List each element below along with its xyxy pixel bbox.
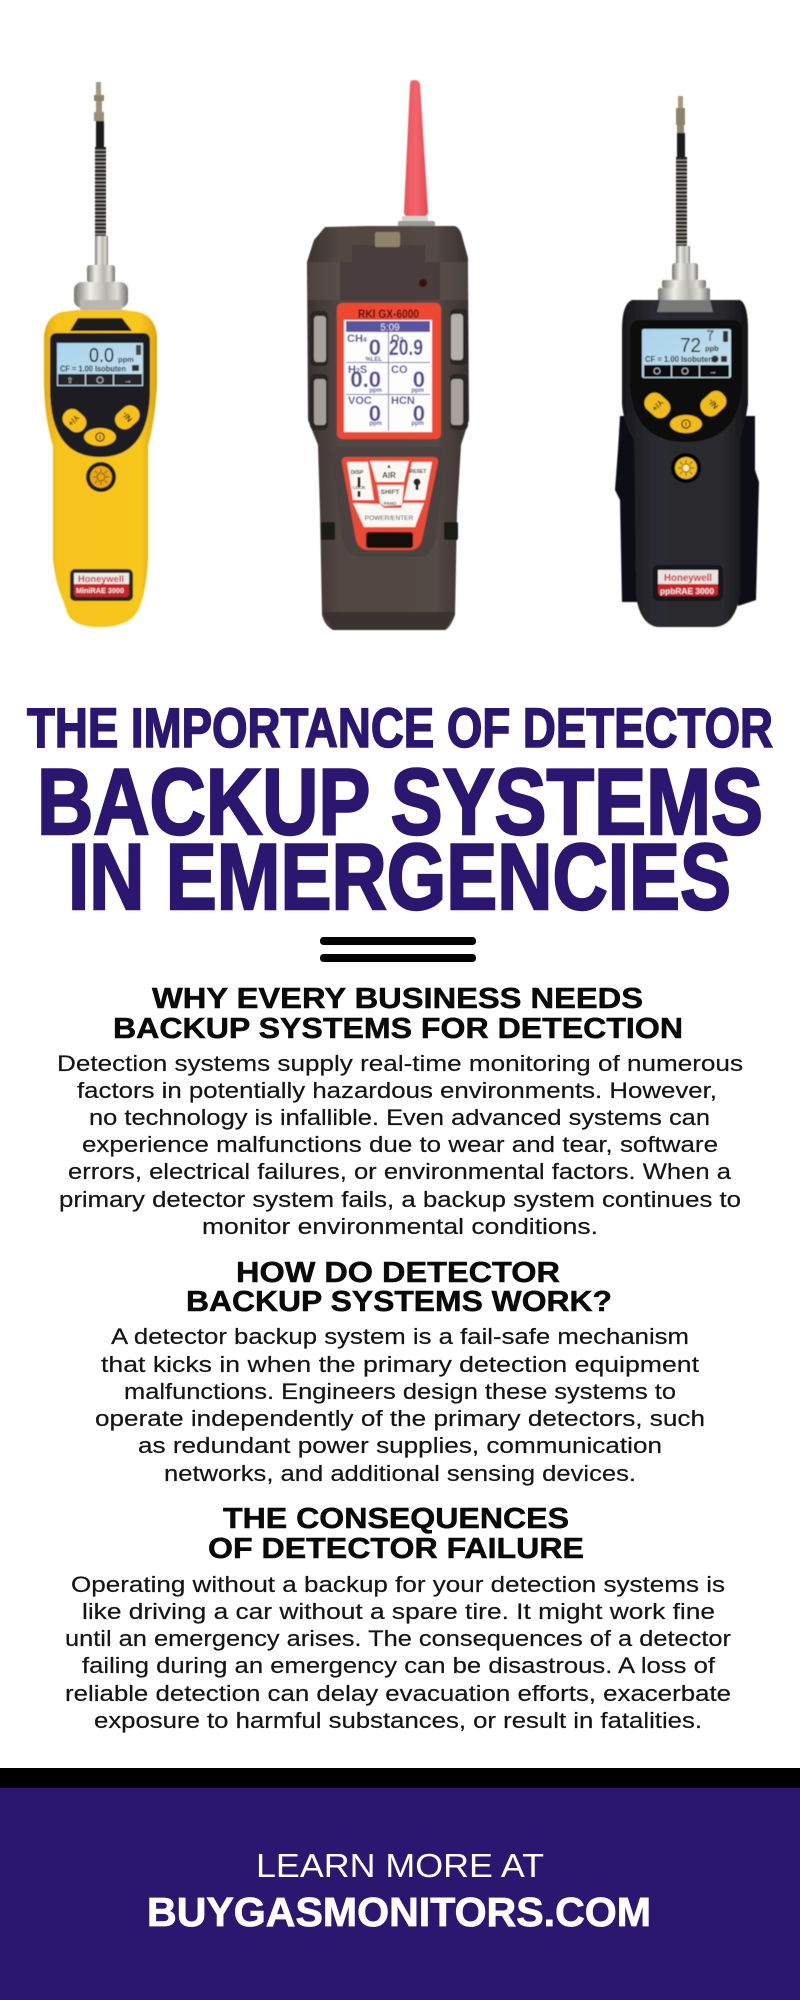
gas readout screen: 0 [413, 367, 425, 392]
body text: section 1: factors in potentially hazardous environments. However, [77, 1078, 717, 1103]
body text: section 3: Operating without a backup for your detection systems is [71, 1572, 725, 1597]
body text: section 3: exposure to harmful substances, or result in fatalities. [94, 1708, 702, 1733]
gas readout screen: 0 [369, 335, 381, 360]
body text: section 1 [57, 1051, 743, 1239]
body text: section 2: A detector backup system is a fail-safe mechanism [111, 1324, 689, 1349]
section 2: how do detector backup systems work [95, 1257, 705, 1486]
heading: the consequences of detector failure [208, 1503, 584, 1565]
section 3: the consequences of detector failure [65, 1503, 731, 1733]
device: dark RKI GX-6000 detector [307, 80, 469, 630]
gas readout screen: %LEL [365, 357, 382, 363]
heading: why every business needs [113, 983, 683, 1045]
black device screen [642, 329, 731, 378]
gas readout screen: CO [391, 364, 408, 376]
gas readout screen: ppm [369, 388, 382, 394]
black device Honeywell label: ppbRAE 3000 [660, 587, 715, 596]
heading: why every business needs: WHY EVERY BUSINESS NEEDS [152, 983, 643, 1015]
body text: section 3 [65, 1572, 731, 1733]
heading: how do detector backup systems work: HOW DO DETECTOR [236, 1257, 560, 1289]
gas readout screen: VOC [348, 395, 372, 407]
yellow device face [50, 333, 150, 457]
body text: section 2: as redundant power supplies, communication [138, 1433, 662, 1458]
black device Honeywell label [653, 565, 723, 601]
black device screen: → [709, 367, 717, 376]
gas readout screen: H2S [348, 364, 367, 376]
keypad [332, 447, 446, 557]
yellow device screen: → [124, 376, 132, 385]
yellow device body [44, 310, 157, 627]
yellow device screen [57, 343, 143, 386]
gas readout screen: 0 [413, 401, 425, 426]
yellow device Honeywell label [70, 569, 133, 601]
heading: how do detector backup systems work [186, 1257, 612, 1318]
keypad: SHIFT [381, 489, 399, 496]
black device face [630, 320, 742, 442]
keypad: DISP [351, 470, 364, 476]
footer text: website: BUYGASMONITORS.COM [147, 1889, 651, 1935]
body text: section 2: operate independently of the primary detectors, such [95, 1406, 705, 1431]
black device buttons: N/- [706, 396, 720, 411]
device: black ppbRAE 3000 detector [615, 96, 759, 627]
yellow device screen: CF = 1.00 Isobuten [60, 364, 126, 374]
gas readout screen: O2 [391, 333, 404, 345]
body text: section 2: that kicks in when the primary detection equipment [101, 1352, 699, 1377]
status LED [419, 279, 427, 287]
keypad: ▲ [386, 464, 392, 470]
footer text: learn more at: LEARN MORE AT [256, 1847, 544, 1884]
yellow device screen: 0.0 [89, 345, 114, 367]
yellow device buttons: Y/+ [66, 413, 81, 428]
device: yellow MiniRAE 3000 detector [44, 82, 157, 627]
yellow device screen: ppm [118, 355, 134, 364]
footer band [0, 1768, 800, 2000]
gas readout screen: 0.0 [350, 367, 381, 392]
body text: section 3: like driving a car without a spare tire. It might work fine [82, 1599, 715, 1624]
gas readout screen: 20.9 [389, 335, 423, 360]
gas readout screen: HCN [391, 395, 415, 407]
side clips [321, 522, 458, 540]
title [27, 696, 773, 929]
black device buttons: Y/+ [650, 398, 665, 413]
body text: section 3: reliable detection can delay evacuation efforts, exacerbate [65, 1681, 731, 1706]
left side windows [310, 311, 328, 430]
icon: yellow device light button [86, 462, 116, 492]
top clip [375, 232, 400, 247]
yellow device buttons: N/- [120, 409, 134, 424]
heading: the consequences of detector failure: OF DETECTOR FAILURE [208, 1533, 584, 1565]
body text: section 1: monitor environmental conditions. [202, 1214, 598, 1239]
yellow device Honeywell label: MiniRAE 3000 [76, 586, 124, 595]
dark device body [307, 226, 469, 630]
gas readout screen: 0 [369, 401, 381, 426]
keypad: POWER/ENTER [365, 515, 413, 522]
body text: section 2 [95, 1324, 705, 1486]
black device Honeywell label: Honeywell [664, 573, 712, 584]
gas readout screen: ppm [369, 421, 382, 427]
body text: section 1: primary detector system fails, a backup system continues to [59, 1187, 741, 1212]
body text: section 1: Detection systems supply real-time monitoring of numerous [57, 1051, 743, 1076]
heading: why every business needs: BACKUP SYSTEMS FOR DETECTION [113, 1013, 683, 1045]
black device probe [658, 96, 710, 302]
body text: section 3: failing during an emergency can be disastrous. A loss of [82, 1653, 716, 1678]
gas readout screen: 5:09 [380, 322, 400, 334]
red screen bezel [337, 303, 441, 439]
heading: the consequences of detector failure: THE CONSEQUENCES [223, 1503, 569, 1535]
body text: section 3: until an emergency arises. The consequences of a detector [65, 1626, 731, 1651]
yellow device Honeywell label: Honeywell [78, 574, 124, 584]
icon: black device light button [671, 453, 701, 483]
yellow device probe [74, 82, 128, 312]
red screen bezel: RKI GX-6000 [358, 307, 419, 321]
keypad: RESET [410, 469, 426, 475]
black device screen: 72 [680, 335, 701, 357]
body text: section 1: experience malfunctions due to wear and tear, software [82, 1132, 718, 1157]
gas readout screen: ppm [411, 388, 424, 394]
right side windows [450, 309, 468, 430]
black device body [622, 300, 748, 627]
keypad: LOCK [353, 485, 366, 490]
gas readout screen: ppm [411, 421, 424, 427]
black device side straps [615, 416, 759, 606]
double rule divider [320, 937, 476, 962]
red antenna [398, 80, 435, 227]
keypad: AIR [382, 471, 396, 480]
heading: how do detector backup systems work: BACKUP SYSTEMS WORK? [186, 1286, 612, 1318]
body text: section 1: errors, electrical failures, or environmental factors. When a [68, 1159, 732, 1184]
black device screen: CF = 1.00 Isobuten [645, 355, 713, 364]
keypad: PANO [384, 501, 397, 506]
section 1: why every business needs backup systems [57, 983, 743, 1239]
black device screen: ppb [705, 344, 719, 353]
black device buttons [641, 387, 730, 433]
yellow device buttons [59, 402, 143, 446]
yellow device screen: ⇧ [67, 376, 73, 385]
body text: section 2: malfunctions. Engineers design these systems to [124, 1379, 676, 1404]
gas readout screen: CH4 [347, 333, 367, 345]
body text: section 2: networks, and additional sensing devices. [164, 1461, 636, 1486]
gas readout screen [344, 320, 432, 432]
body text: section 1: no technology is infallible. Even advanced systems can [89, 1105, 710, 1130]
